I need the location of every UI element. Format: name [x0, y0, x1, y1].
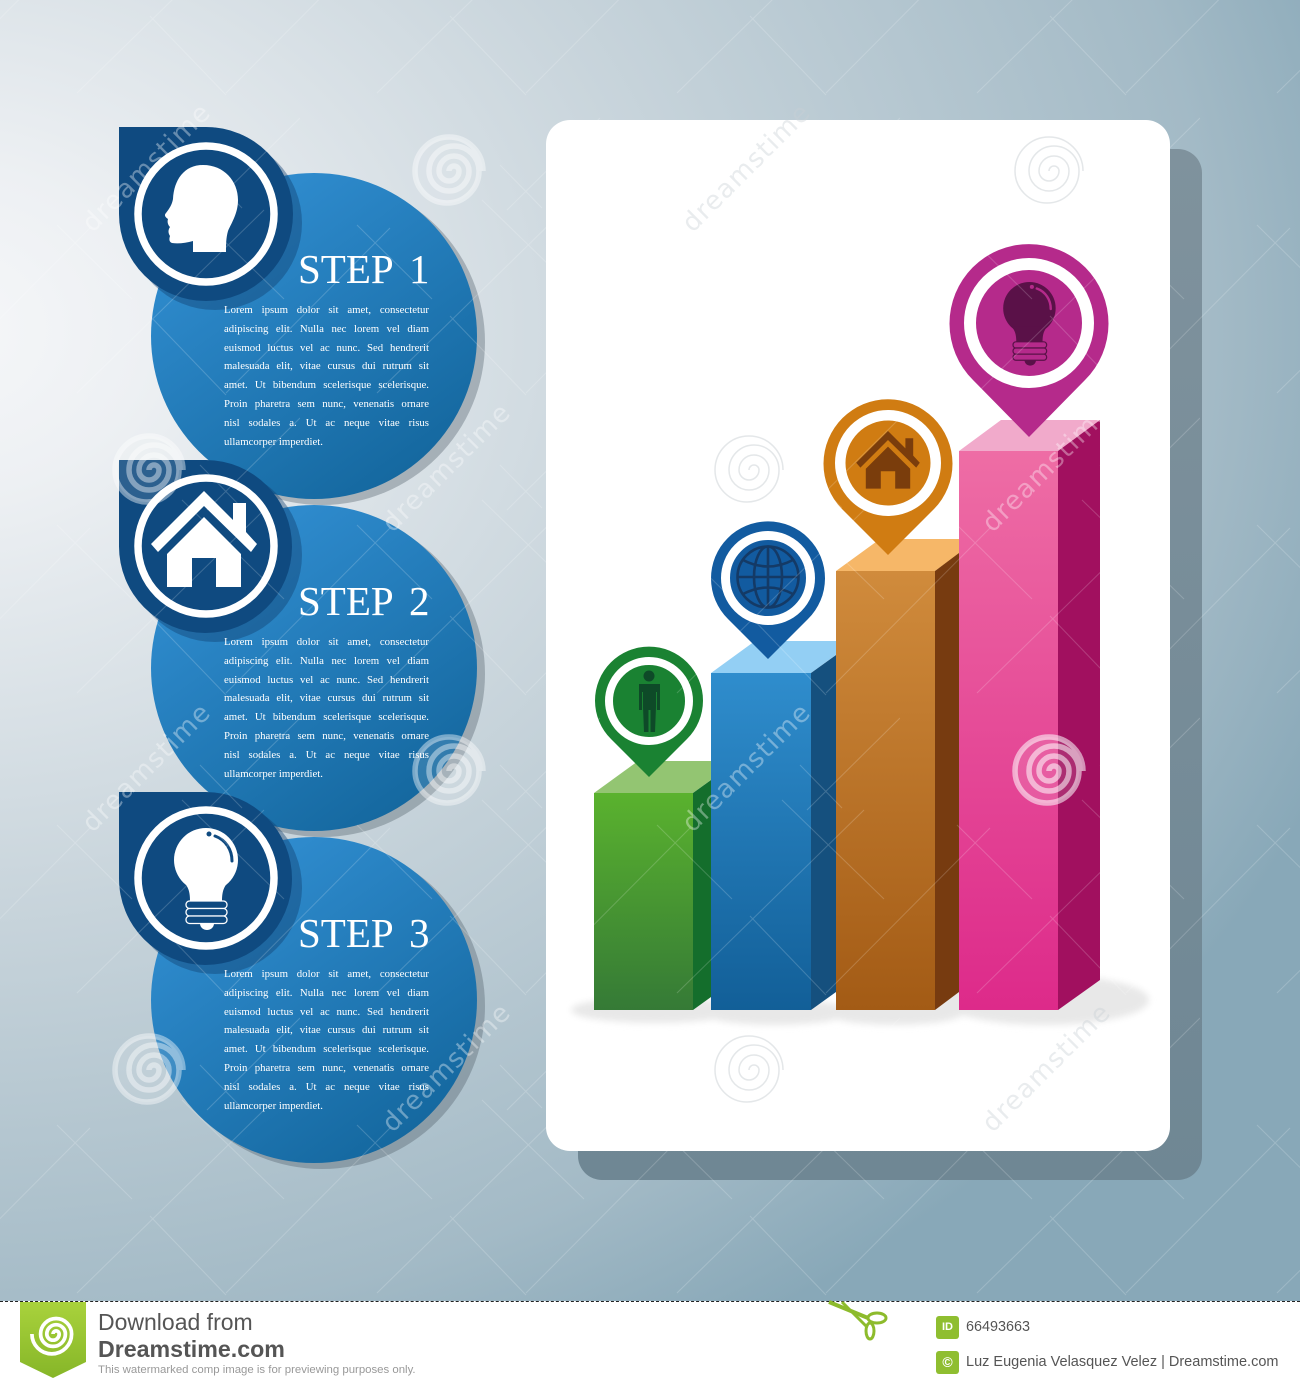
- text block: step 2: euismod luctus vel ac nunc. Sed hendrerit: [224, 674, 429, 686]
- watermark spiral: [1015, 737, 1083, 803]
- text block: step 2: amet. Ut bibendum scelerisque scelerisque.: [224, 711, 429, 723]
- text: author credit: Luz Eugenia Velasquez Velez | Dreamstime.com: [966, 1354, 1278, 1370]
- watermark spiral on card: [715, 1036, 783, 1102]
- pin: blue globe: [711, 521, 825, 659]
- icon: person: [639, 670, 660, 732]
- watermark text: dreamstime: [676, 698, 816, 838]
- icon: head: [165, 165, 238, 252]
- text block: step 2: Proin pharetra sem nunc, venenatis ornare: [224, 730, 429, 742]
- text block: step 3: ullamcorper imperdiet.: [224, 1100, 323, 1112]
- icon: house: [151, 491, 257, 587]
- watermark spiral on card: [1015, 137, 1083, 203]
- panel: step 3: [119, 792, 485, 1169]
- bar: green: [594, 761, 737, 1010]
- text block: step 1: nisl sodales a. Ut ac neque vitae risus: [224, 417, 429, 429]
- pin: green person: [595, 647, 703, 777]
- text block: step 3: malesuada elit, vitae cursus dui rutrum sit: [224, 1024, 429, 1036]
- watermark text on card: dreamstime: [976, 998, 1116, 1138]
- text block: step 3: amet. Ut bibendum scelerisque scelerisque.: [224, 1043, 429, 1055]
- text block: step 2: ullamcorper imperdiet.: [224, 768, 323, 780]
- text block: step 3: euismod luctus vel ac nunc. Sed hendrerit: [224, 1006, 429, 1018]
- icon: house small: [856, 431, 920, 489]
- bar: orange: [836, 539, 979, 1010]
- icon: green ribbon logo: [20, 1302, 86, 1378]
- text block: step 1: ullamcorper imperdiet.: [224, 436, 323, 448]
- heading: step 1: STEP: [298, 246, 394, 292]
- icon: id badge: [936, 1316, 959, 1339]
- text block: step 2: adipiscing elit. Nulla nec lorem vel diam: [224, 655, 429, 667]
- text block: step 2: nisl sodales a. Ut ac neque vitae risus: [224, 749, 429, 761]
- watermark text: dreamstime: [976, 398, 1116, 538]
- text: disclaimer: This watermarked comp image is for previewing purposes only.: [98, 1364, 416, 1376]
- watermark text: dreamstime: [76, 698, 216, 838]
- footer strip: [0, 1301, 1300, 1390]
- icon: light bulb: [174, 828, 238, 930]
- panel: chart card: [546, 120, 1170, 1151]
- text block: step 2: malesuada elit, vitae cursus dui rutrum sit: [224, 692, 429, 704]
- watermark text: dreamstime: [376, 398, 516, 538]
- text: image id: 66493663: [966, 1319, 1030, 1335]
- text block: step 2: Lorem ipsum dolor sit amet, consectetur: [224, 636, 429, 648]
- pin: orange house: [823, 399, 952, 555]
- watermark text on card: dreamstime: [676, 98, 816, 238]
- text block: step 1: malesuada elit, vitae cursus dui rutrum sit: [224, 360, 429, 372]
- text block: step 3: adipiscing elit. Nulla nec lorem vel diam: [224, 987, 429, 999]
- text block: step 1: [224, 304, 429, 448]
- card shadow: [578, 149, 1202, 1180]
- text block: step 1: Proin pharetra sem nunc, venenatis ornare: [224, 398, 429, 410]
- watermark spiral: [115, 436, 183, 502]
- bar: pink: [959, 420, 1100, 1010]
- icon: globe: [738, 546, 798, 608]
- text block: step 1: amet. Ut bibendum scelerisque scelerisque.: [224, 379, 429, 391]
- text: dreamstime.com: Dreamstime.com: [98, 1336, 285, 1362]
- text block: step 1: euismod luctus vel ac nunc. Sed hendrerit: [224, 342, 429, 354]
- heading: step 3: 3: [409, 910, 430, 956]
- icon: copyright badge: ©: [942, 1354, 953, 1370]
- text block: step 3: Proin pharetra sem nunc, venenatis ornare: [224, 1062, 429, 1074]
- text: download from: Download from: [98, 1309, 253, 1335]
- watermark spiral: [115, 1036, 183, 1102]
- text block: step 3: Lorem ipsum dolor sit amet, consectetur: [224, 968, 429, 980]
- text block: step 3: [224, 968, 429, 1112]
- icon: id badge: ID: [942, 1321, 953, 1333]
- panel: step 2: [119, 460, 485, 837]
- heading: step 1: 1: [409, 246, 430, 292]
- heading: step 3: STEP: [298, 910, 394, 956]
- chart: 3D bar chart with location pins: [572, 244, 1150, 1026]
- watermark spiral: [415, 737, 483, 803]
- watermark text: dreamstime: [76, 98, 216, 238]
- pin: pink bulb: [950, 244, 1108, 437]
- text block: step 2: [224, 636, 429, 780]
- heading: step 2: 2: [409, 578, 430, 624]
- icon: bulb small: [1003, 282, 1056, 366]
- icon: scissors: [828, 1300, 888, 1340]
- bar: blue: [711, 641, 855, 1010]
- icon: copyright badge: [936, 1351, 959, 1374]
- floor shadows: [571, 975, 1149, 1025]
- text block: step 3: nisl sodales a. Ut ac neque vitae risus: [224, 1081, 429, 1093]
- text block: step 1: adipiscing elit. Nulla nec lorem vel diam: [224, 323, 429, 335]
- panel: step 1: [119, 127, 485, 505]
- text block: step 1: Lorem ipsum dolor sit amet, consectetur: [224, 304, 429, 316]
- heading: step 2: STEP: [298, 578, 394, 624]
- watermark spiral: [415, 137, 483, 203]
- watermark spiral on card: [715, 436, 783, 502]
- watermark text: dreamstime: [376, 998, 516, 1138]
